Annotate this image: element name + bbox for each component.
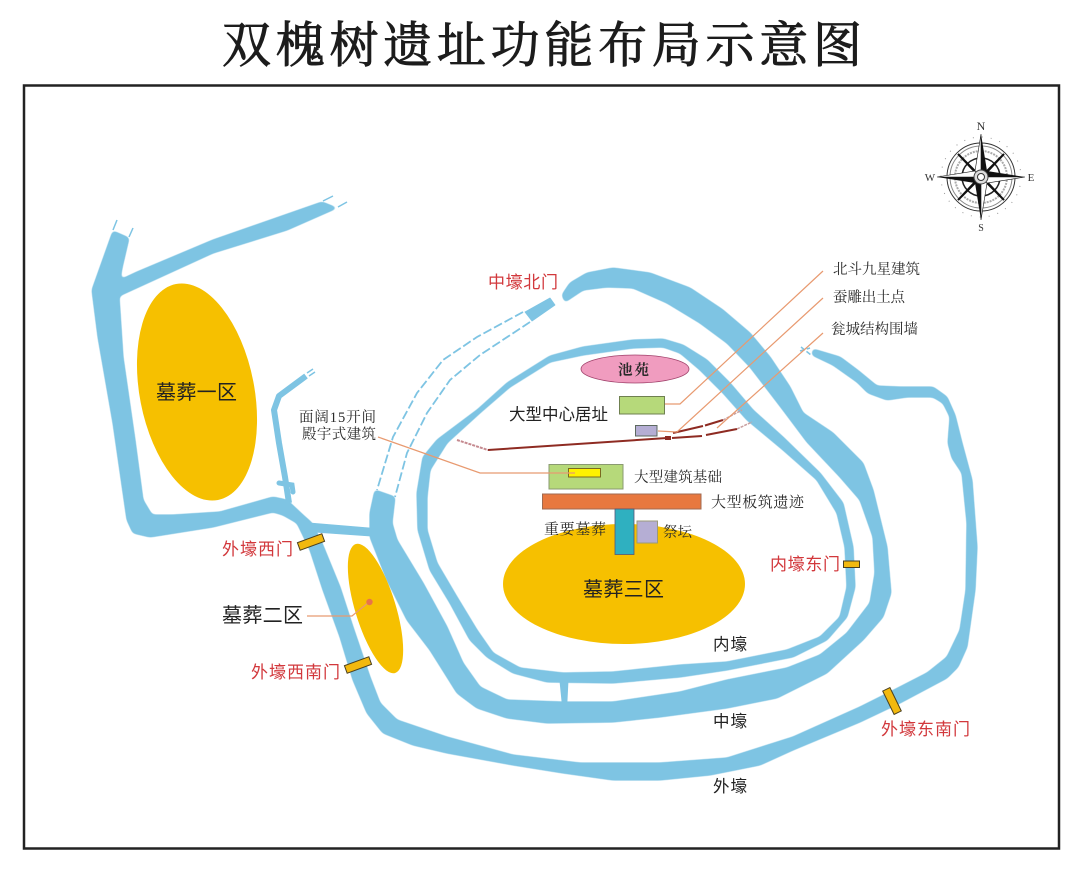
leader lines	[307, 271, 823, 616]
burial zone 2	[336, 538, 415, 679]
pond garden	[581, 355, 689, 383]
label: barbican wall: 瓮城结构围墙	[831, 320, 918, 338]
gate: inner east	[844, 561, 860, 568]
middle moat north fragment	[525, 298, 555, 321]
moat bridge channel	[560, 682, 568, 702]
label: inner moat: 内壕	[713, 635, 748, 654]
title: 双槐树遗址功能布局示意图	[222, 18, 862, 73]
gate: outer southwest	[344, 657, 372, 673]
burial zone 3	[503, 524, 745, 644]
label: central residence: 大型中心居址	[509, 405, 608, 424]
label: silkworm carving site: 蚕雕出土点	[833, 288, 906, 306]
label: large foundation: 大型建筑基础	[634, 468, 722, 486]
label: important burials: 重要墓葬	[544, 520, 606, 538]
gate: outer southeast	[883, 688, 901, 714]
hall building yellow box	[568, 468, 600, 477]
burial zone 1	[120, 273, 274, 511]
compass rose: W	[925, 172, 936, 184]
label: palace building: 面阔15开间	[299, 409, 376, 426]
large building foundation	[549, 464, 623, 489]
wall lines	[457, 410, 752, 450]
rammed earth remains	[542, 494, 701, 509]
pond garden: 池苑	[618, 361, 650, 379]
compass rose	[925, 119, 1035, 234]
compass rose: E	[1028, 172, 1035, 184]
label: palace building: 殿宇式建筑	[302, 426, 376, 443]
label: burial zone 3: 墓葬三区	[583, 578, 664, 601]
middle moat	[370, 268, 891, 723]
inner moat	[417, 339, 855, 683]
outer moat	[92, 202, 977, 780]
label: north gate: 中壕北门	[488, 273, 558, 292]
burial zone 2 marker dot	[366, 599, 373, 605]
moat break dashes	[113, 196, 811, 376]
west connector channel	[310, 523, 370, 536]
gate: outer west	[297, 534, 325, 550]
label: middle moat: 中壕	[713, 712, 748, 731]
altar purple box	[637, 521, 658, 543]
label: outer southwest gate: 外壕西南门	[251, 663, 340, 682]
label: outer moat: 外壕	[713, 777, 748, 796]
middle moat dashed section	[377, 312, 530, 497]
label: rammed earth: 大型板筑遗迹	[711, 493, 805, 511]
label: outer west gate: 外壕西门	[222, 540, 293, 559]
important burials teal box	[615, 509, 634, 554]
compass rose: S	[978, 223, 984, 234]
label: palace building	[299, 409, 376, 443]
central residence green box	[620, 396, 664, 414]
label: Big Dipper buildings: 北斗九星建筑	[833, 261, 920, 278]
label: inner east gate: 内壕东门	[770, 555, 840, 574]
label: burial zone 2: 墓葬二区	[222, 604, 303, 627]
compass rose: N	[977, 119, 986, 133]
label: outer southeast gate: 外壕东南门	[881, 720, 970, 739]
label: burial zone 1: 墓葬一区	[156, 381, 237, 404]
small western stream	[274, 376, 306, 503]
label: altar: 祭坛	[663, 524, 692, 541]
small purple building	[636, 426, 657, 436]
